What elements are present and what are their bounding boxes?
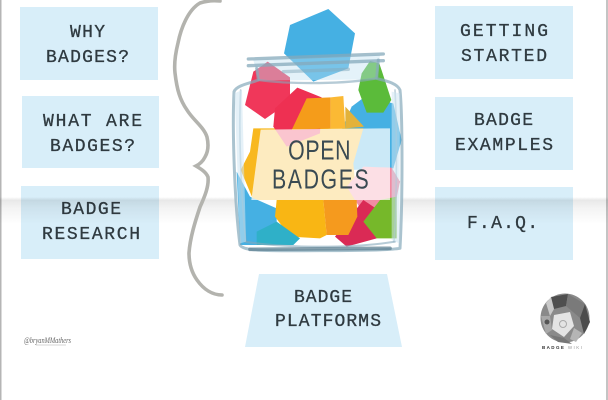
box: getting started bbox=[435, 6, 573, 79]
badge: crimson lower right bbox=[335, 200, 383, 247]
jar with badges bbox=[233, 9, 402, 251]
badge: orange centre bbox=[292, 97, 331, 130]
badge: teal bottom bbox=[257, 222, 300, 245]
box: badge examples bbox=[435, 97, 573, 170]
box: what are badges: BADGES? bbox=[50, 137, 135, 157]
box: why badges: BADGES? bbox=[46, 48, 129, 68]
box: badge research bbox=[21, 186, 159, 259]
jar outline bbox=[233, 54, 402, 251]
curly brace bbox=[175, 1, 222, 295]
box: badge platforms bbox=[245, 274, 402, 347]
box: getting started: GETTING bbox=[460, 22, 548, 42]
box: badge research: RESEARCH bbox=[42, 225, 140, 245]
badge: green lower right bbox=[363, 197, 397, 238]
box: badge examples: EXAMPLES bbox=[455, 136, 553, 156]
badge: crimson centre bbox=[273, 88, 322, 147]
badge: yellow lower bbox=[275, 200, 327, 238]
jar wall highlights bbox=[235, 90, 400, 243]
badge: mustard centre bbox=[345, 107, 364, 128]
open badges label bbox=[251, 128, 390, 200]
badge: blue lower left bbox=[237, 172, 277, 245]
badge: blue hexagon top bbox=[284, 9, 355, 82]
box: getting started: STARTED bbox=[461, 47, 547, 67]
box: what are badges: WHAT ARE bbox=[43, 112, 142, 132]
author credit: @bryanMMathers bbox=[24, 336, 71, 345]
badge: red left bbox=[245, 62, 290, 119]
badge: yellow main bbox=[241, 128, 363, 200]
box: faq: F.A.Q. bbox=[467, 214, 538, 234]
jar interior backing bbox=[233, 78, 402, 250]
badge wiki logo bbox=[540, 294, 590, 350]
open badges label: OPEN bbox=[288, 136, 351, 166]
icon: faceted ball bbox=[540, 294, 590, 344]
box: badge platforms: BADGE bbox=[294, 288, 352, 308]
badge: green top right bbox=[358, 61, 391, 113]
box: why badges bbox=[20, 7, 158, 80]
box: badge research: BADGE bbox=[61, 200, 121, 220]
logo wordmark: BADGE WIKI bbox=[542, 345, 583, 350]
open badges label: BADGES bbox=[272, 165, 369, 195]
badge: blue right bbox=[340, 97, 402, 170]
jar neck glass bbox=[253, 55, 380, 81]
box: badge platforms: PLATFORMS bbox=[275, 312, 381, 332]
box: why badges: WHY bbox=[70, 23, 105, 43]
box: what are badges bbox=[22, 96, 159, 168]
box: badge examples: BADGE bbox=[474, 111, 533, 131]
badge: orange lower bbox=[323, 200, 357, 235]
box: faq bbox=[435, 187, 573, 260]
badge: pink right bbox=[347, 167, 400, 213]
badge: amber centre bbox=[331, 96, 345, 128]
